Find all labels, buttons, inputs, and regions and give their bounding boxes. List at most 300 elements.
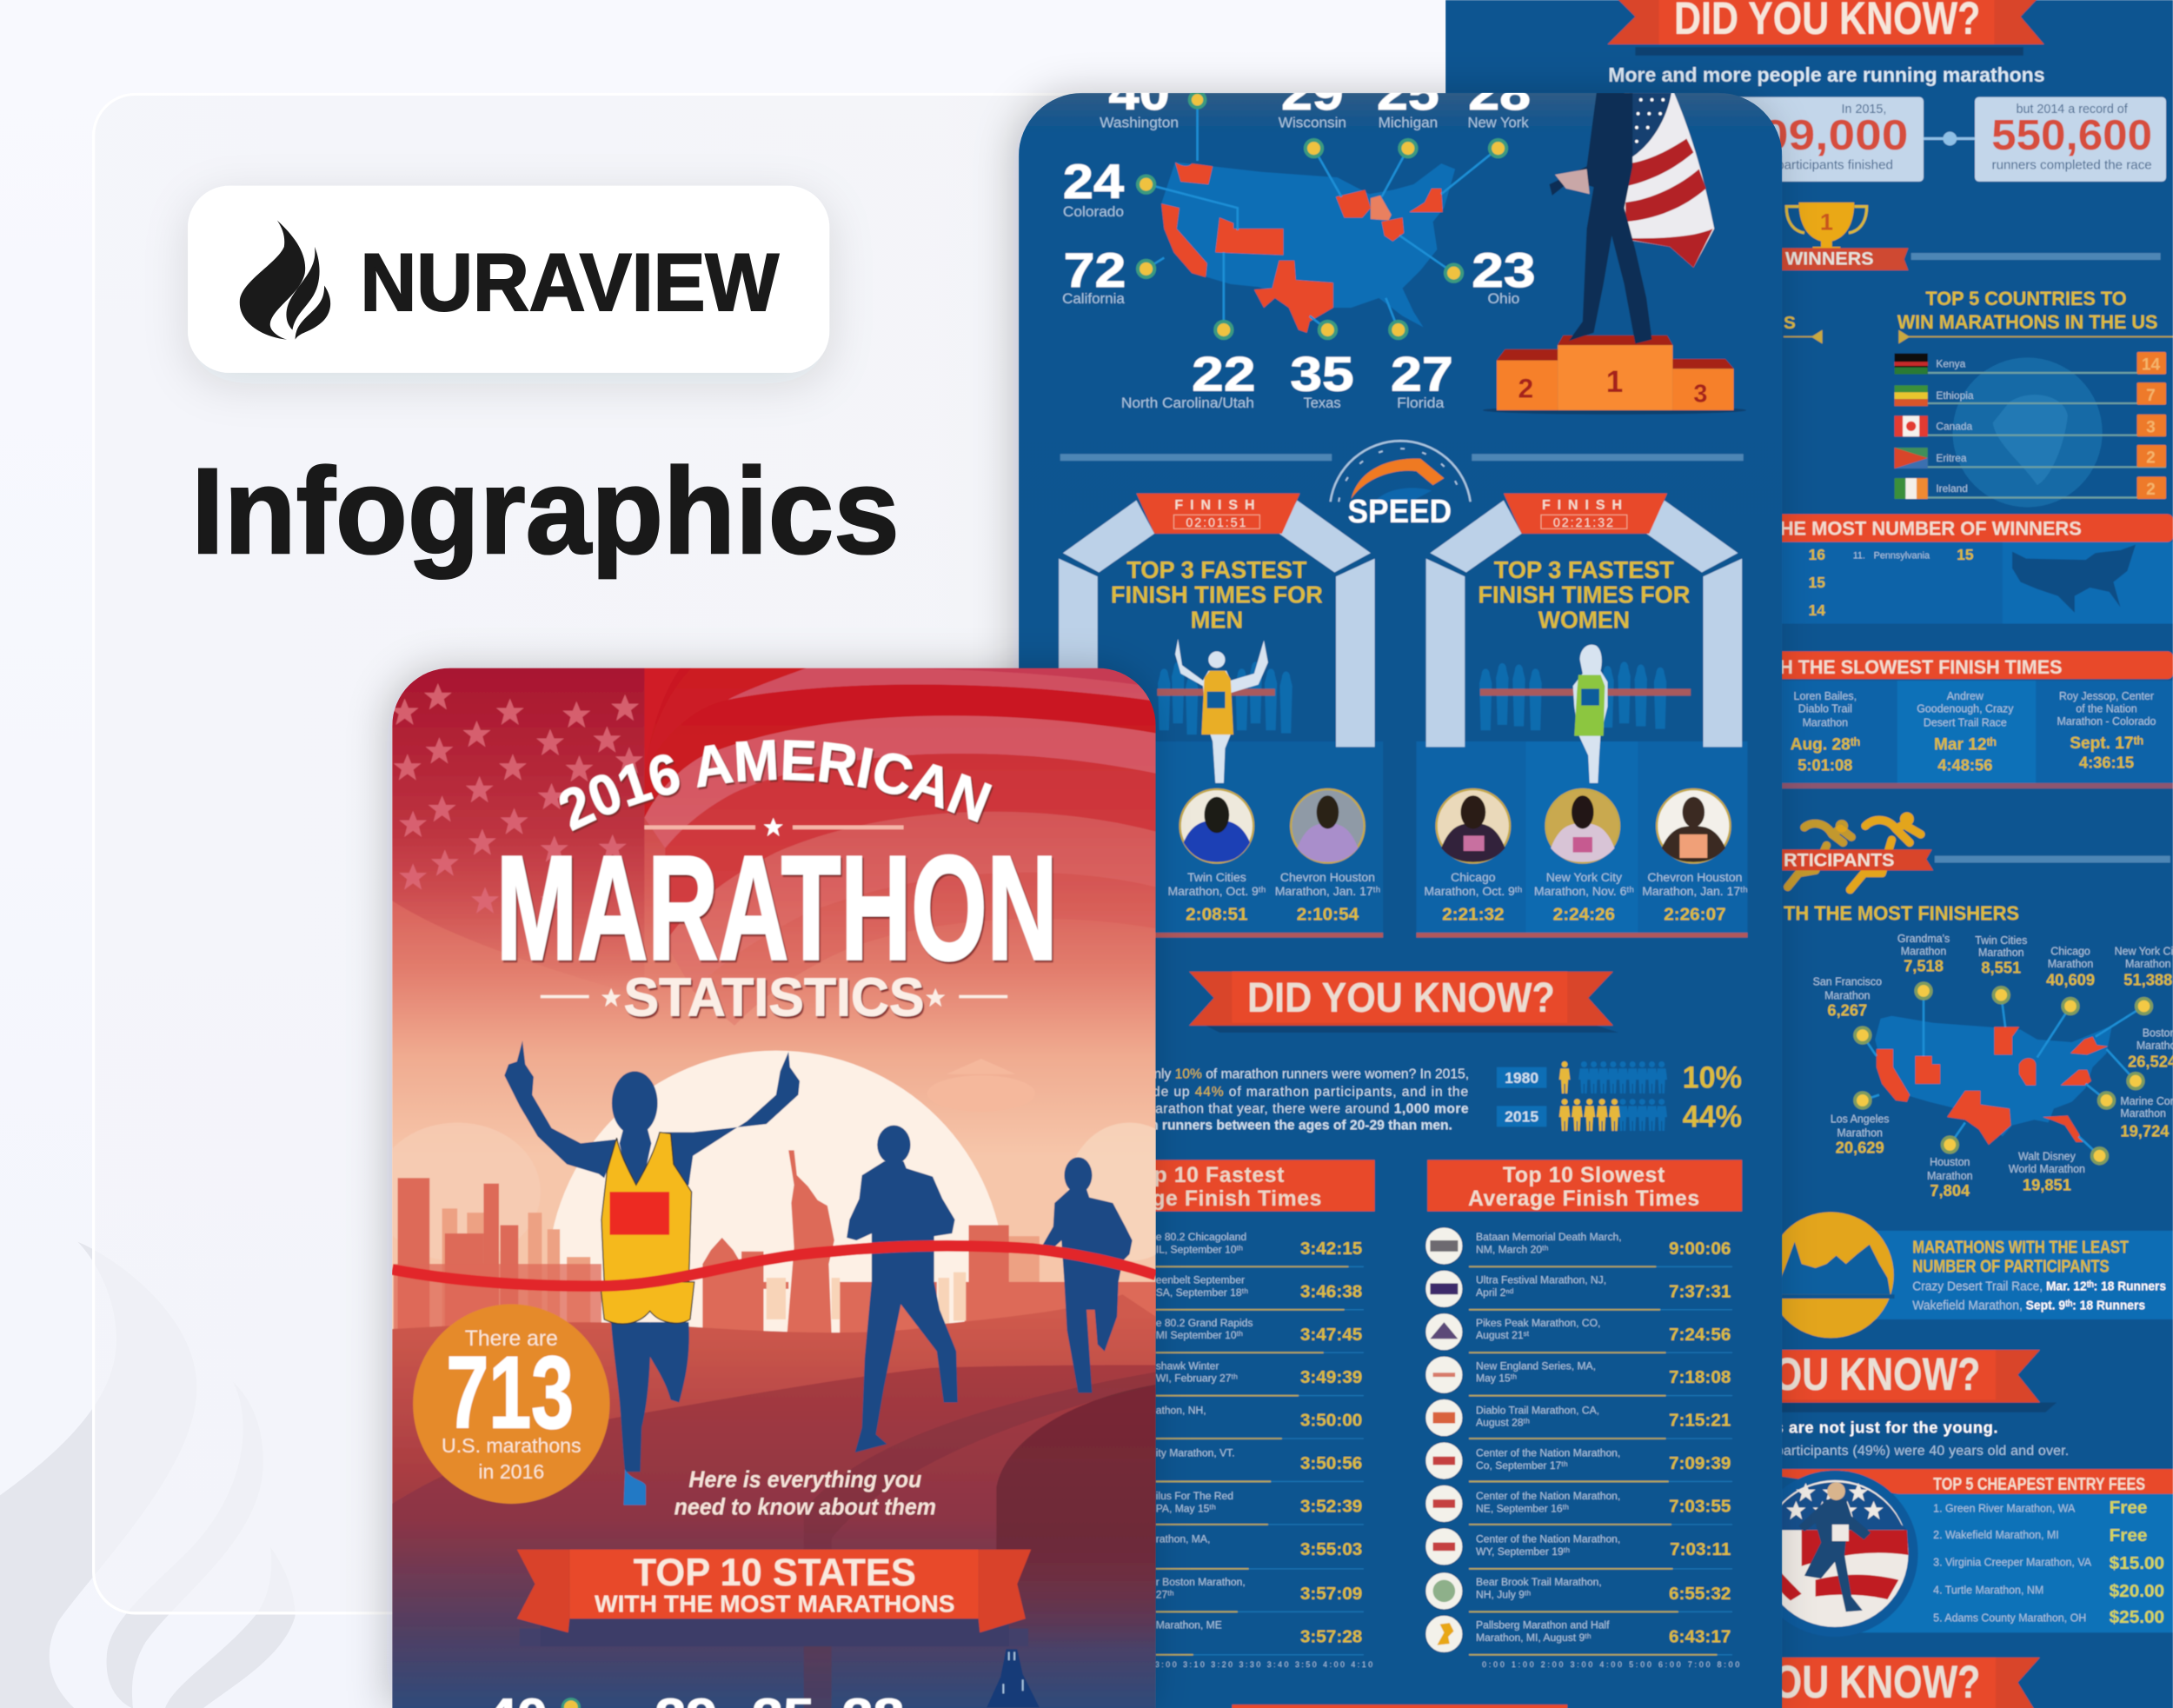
- finish time labels: New York City: [1546, 870, 1622, 884]
- icon: American flag runner badge: [1751, 1471, 1918, 1637]
- map labels: 8,551: [1981, 958, 2021, 976]
- text: top 5 countries: WIN MARATHONS IN THE US: [1897, 311, 2158, 333]
- icon: trophy: 1: [1820, 209, 1833, 236]
- paragraph: women runners: women made up 44% of marathon participants, and in the: [1080, 1085, 1469, 1100]
- map labels: Houston: [1930, 1156, 1970, 1168]
- banner: winners: WINNERS: [1785, 249, 1874, 269]
- panel: top 5 cheapest entry fees: 5. Adams County Marathon, OH: [1933, 1612, 2086, 1624]
- table: slowest finish times: Top 10 Slowest: [1503, 1164, 1665, 1187]
- panel: top 5 cheapest entry fees: 2. Wakefield Marathon, MI: [1933, 1529, 2059, 1541]
- table: fastest finish times: 3:49:39: [1300, 1367, 1362, 1387]
- section: slowest finish times: 4:48:56: [1937, 756, 1992, 774]
- finish time labels: 2:24:26: [1553, 905, 1615, 925]
- table: fastest finish times: 3:47:45: [1300, 1325, 1362, 1345]
- state numbers: [487, 1688, 904, 1708]
- row: Canada: 3: [2146, 418, 2156, 436]
- state numbers: 23: [1472, 243, 1536, 297]
- table: fastest finish times: 3:50:00: [1300, 1411, 1362, 1431]
- figure: lead runner: [504, 1040, 800, 1505]
- figure: athlete with flag: [1550, 93, 1714, 343]
- table: fastest finish times: r Boston Marathon,: [1156, 1576, 1246, 1588]
- state names: Ohio: [1488, 290, 1519, 307]
- section: most number of winners: 16: [1809, 546, 1825, 563]
- portraits: [1180, 789, 1731, 863]
- podium: [1483, 336, 1746, 415]
- banner: did you know top: [1607, 0, 2044, 56]
- finish time labels: [1167, 870, 1748, 925]
- stat box: 2014: runners completed the race: [1992, 158, 2152, 173]
- state numbers: 72: [1064, 243, 1126, 297]
- state numbers: 22: [1192, 347, 1256, 402]
- section: most number of winners: 14: [1809, 601, 1825, 619]
- table: fastest finish times: 3:50:56: [1300, 1453, 1362, 1473]
- flag stripes: [644, 668, 1156, 1026]
- state marker: [562, 1699, 579, 1708]
- state numbers: 24: [1063, 154, 1124, 209]
- arch: men: TOP 3 FASTEST: [1126, 556, 1307, 583]
- text: intro tagline: [674, 1465, 936, 1520]
- map labels: San Francisco: [1813, 976, 1882, 988]
- map labels: Marathon: [2120, 1107, 2166, 1120]
- gauge: speed: SPEED: [1348, 493, 1452, 530]
- title line: Statistics: STATISTICS: [623, 968, 924, 1028]
- table: slowest finish times: Co, September 17ᵗʰ: [1476, 1459, 1568, 1472]
- panel: top 5 cheapest entry fees: $25.00: [2110, 1607, 2164, 1627]
- star divider: [644, 818, 904, 836]
- paragraph: women runners: last marathon that year, there were around 1,000 more: [1117, 1101, 1469, 1116]
- banner: next section: [1232, 1705, 1567, 1708]
- text: not just for the young: Marathons are not just for the young.: [1699, 1419, 1998, 1437]
- table: fastest finish times: Top 10 Fastest: [1128, 1164, 1285, 1187]
- section: slowest finish times: Desert Trail Race: [1924, 716, 2007, 728]
- table: fastest finish times: Average Finish Times: [1090, 1187, 1322, 1211]
- banner: participants: RTICIPANTS: [1784, 850, 1895, 871]
- map labels: 19,851: [2023, 1176, 2071, 1194]
- callout: 713 marathons: U.S. marathons: [442, 1434, 581, 1457]
- panel: top 5 cheapest entry fees: [1732, 1469, 2173, 1632]
- finish time labels: 2:10:54: [1297, 905, 1359, 925]
- map labels: Los Angeles: [1831, 1113, 1890, 1125]
- row: Ethiopia: [1895, 382, 2166, 406]
- panel: least participants: MARATHONS WITH THE LEAST: [1912, 1238, 2129, 1257]
- section: slowest finish times: Marathon: [1803, 716, 1848, 728]
- row: Eritrea: [1895, 445, 2166, 469]
- text: top 5 countries: TOP 5 COUNTRIES TO: [1925, 288, 2127, 309]
- panel: top 5 cheapest entry fees: 3. Virginia Creeper Marathon, VA: [1933, 1557, 2092, 1569]
- stat box: 2014: [1975, 97, 2166, 182]
- finish time labels: 2:08:51: [1186, 905, 1248, 925]
- map labels: Grandma's: [1897, 933, 1950, 945]
- table: slowest finish times: NE, September 16ᵗʰ: [1476, 1503, 1569, 1515]
- podium: 1: [1606, 365, 1623, 399]
- section: slowest finish times: [1732, 651, 2173, 788]
- banner: did you know: DID YOU KNOW?: [1247, 975, 1555, 1021]
- state names: Florida: [1397, 395, 1445, 411]
- row: Eritrea: 2: [2146, 449, 2156, 468]
- map labels: Marathon: [1978, 947, 2024, 959]
- section: most number of winners: [1732, 515, 2173, 624]
- table: slowest finish times: Center of the Nation Marathon,: [1476, 1533, 1620, 1545]
- section: most number of winners: Pennsylvania: [1874, 551, 1930, 562]
- figure: background runner center: [847, 1126, 958, 1452]
- banner: did you know middle: [1607, 1349, 2057, 1412]
- banner: winners: [1732, 248, 2161, 270]
- pictogram: 1980 vs 2015: 1980: [1505, 1069, 1538, 1087]
- table: slowest finish times: Diablo Trail Marathon, CA,: [1476, 1404, 1599, 1416]
- banner: participants: [1732, 849, 2170, 871]
- section: slowest finish times: of the Nation: [2076, 703, 2137, 715]
- table: slowest finish times: Center of the Nation Marathon,: [1476, 1447, 1620, 1459]
- map labels: Twin Cities: [1975, 934, 2027, 947]
- portrait: New York City winner: [1546, 789, 1619, 863]
- finish time labels: Chevron Houston: [1647, 870, 1742, 884]
- stat box: 2014: 550,600: [1991, 111, 2152, 159]
- arch: women: FINISH TIMES FOR: [1478, 582, 1690, 608]
- wordmark: NURAVIEW: [361, 236, 779, 328]
- map labels: Walt Disney: [2018, 1151, 2077, 1163]
- pictogram: 1980 vs 2015: 2015: [1505, 1108, 1538, 1126]
- paragraph: women runners: women runners between the ages of 20-29 than men.: [1111, 1118, 1452, 1133]
- text: top 5 countries: S: [1784, 313, 1796, 333]
- table: slowest finish times: Pikes Peak Marathon, CO,: [1476, 1317, 1600, 1329]
- table: fastest finish times: e 80.2 Grand Rapids: [1156, 1317, 1253, 1329]
- finish time labels: 2:26:07: [1664, 905, 1726, 925]
- pictogram: 1980 vs 2015: 44%: [1683, 1100, 1742, 1133]
- table: slowest finish times: NH, July 9ᵗʰ: [1476, 1588, 1532, 1600]
- stat box: 2015: participants finished: [1777, 158, 1893, 173]
- row: Canada: [1895, 415, 2166, 436]
- panel: top 5 cheapest entry fees: 4. Turtle Marathon, NM: [1933, 1585, 2043, 1597]
- section: slowest finish times: Sept. 17ᵗʰ: [2070, 734, 2143, 753]
- table: fastest finish times: 3:00 3:10 3:20 3:30 3:40 3:50 4:00 4:10: [1155, 1660, 1375, 1669]
- section: most number of winners: 11.: [1853, 551, 1865, 562]
- finish time labels: Marathon, Jan. 17ᵗʰ: [1642, 884, 1748, 898]
- table: fastest finish times: IL, September 10ᵗʰ: [1156, 1243, 1243, 1255]
- portrait: Chicago winner: [1437, 789, 1510, 863]
- callout: 713 marathons: There are: [465, 1327, 558, 1351]
- table: slowest finish times: 6:43:17: [1669, 1626, 1731, 1646]
- heading: most finishers: TH THE MOST FINISHERS: [1784, 902, 2019, 925]
- finish ribbon: [392, 1246, 1156, 1286]
- panel: front infographic: [367, 648, 1168, 1708]
- map labels: World Marathon: [2009, 1163, 2085, 1175]
- table: slowest finish times: 7:15:21: [1669, 1411, 1731, 1431]
- row: Canada: Canada: [1936, 420, 1973, 432]
- icon: flame logo: [240, 221, 330, 340]
- map labels: Marathon: [1901, 946, 1946, 958]
- row: Eritrea: Eritrea: [1936, 452, 1967, 464]
- section: most number of winners: THE MOST NUMBER OF WINNERS: [1768, 517, 2082, 539]
- table: slowest finish times: Bataan Memorial Death March,: [1476, 1231, 1622, 1243]
- section: slowest finish times: Aug. 28ᵗʰ: [1791, 736, 1860, 754]
- section: slowest finish times: Mar 12ᵗʰ: [1934, 736, 1997, 754]
- map labels: Marathon: [2048, 958, 2093, 970]
- banner: did you know: [1189, 972, 1618, 1033]
- map labels: 20,629: [1836, 1139, 1884, 1157]
- finish time labels: Marathon, Nov. 6ᵗʰ: [1534, 884, 1634, 898]
- panel: top 5 cheapest entry fees: Free: [2110, 1498, 2147, 1518]
- table: fastest finish times: ilus For The Red: [1156, 1490, 1233, 1502]
- map labels: Chicago: [2050, 946, 2090, 958]
- finish time labels: 2:21:32: [1442, 905, 1505, 925]
- table: slowest finish times: 7:37:31: [1669, 1281, 1731, 1301]
- panel: finish cards: [1109, 741, 1748, 938]
- section: slowest finish times: Loren Bailes,: [1794, 690, 1857, 702]
- table: slowest finish times: 6:55:32: [1669, 1584, 1731, 1604]
- row: Kenya: 14: [2142, 356, 2160, 375]
- title: [501, 739, 1053, 1020]
- logo badge: [188, 186, 829, 373]
- table: slowest finish times: New England Series, MA,: [1476, 1359, 1596, 1372]
- arch: men: MEN: [1191, 606, 1243, 633]
- section: most number of winners: 15: [1957, 546, 1974, 563]
- banner: did you know middle: DID YOU KNOW?: [1674, 1349, 1980, 1400]
- banner: top 10 states: [517, 1550, 1031, 1646]
- panel: least participants: [1767, 1212, 2173, 1338]
- table: fastest finish times: 27ᵗʰ: [1156, 1588, 1174, 1600]
- map labels: 40,609: [2046, 971, 2095, 989]
- finish time labels: Chicago: [1451, 870, 1496, 884]
- section: slowest finish times: 4:36:15: [2079, 753, 2134, 771]
- state numbers: 35: [1290, 347, 1354, 402]
- icon: gold runners: [1788, 816, 1921, 890]
- table: fastest finish times: 3:46:38: [1300, 1281, 1362, 1301]
- figure: male finisher: [1157, 639, 1275, 783]
- watermark flame: [0, 1242, 296, 1708]
- panel: rear infographic: [1445, 0, 2173, 1708]
- row: Kenya: [1895, 352, 2166, 375]
- portrait: Twin Cities winner: [1180, 789, 1253, 863]
- table: slowest finish times: 9:00:06: [1669, 1239, 1731, 1259]
- icon: trophy: [1786, 203, 1867, 252]
- state names: Michigan: [1379, 115, 1438, 131]
- map labels: 51,388: [2123, 971, 2172, 989]
- table: slowest finish times: Marathon, MI, August 9ᵗʰ: [1476, 1632, 1592, 1644]
- text: not just for the young: [1688, 1419, 2069, 1459]
- table: slowest finish times: Ultra Festival Marathon, NJ,: [1476, 1273, 1606, 1286]
- figure: background runner right: [1042, 1157, 1133, 1392]
- map: winners: [2012, 545, 2136, 613]
- section: slowest finish times: Marathon - Colorado: [2057, 715, 2156, 728]
- arch: men: [1059, 494, 1375, 747]
- section: slowest finish times: Roy Jessop, Center: [2059, 690, 2154, 702]
- state numbers: 29: [1281, 65, 1344, 120]
- map: finishers: [1875, 1016, 2112, 1145]
- state numbers: [1063, 65, 1536, 402]
- arch: men: 02:01:51: [1186, 516, 1247, 530]
- table: slowest finish times: Bear Brook Trail Marathon,: [1476, 1576, 1602, 1588]
- section: most number of winners: 15: [1809, 574, 1825, 591]
- callout: 713 marathons: [413, 1304, 610, 1504]
- map connectors and markers: [1855, 983, 2151, 1164]
- table: slowest finish times: 7:03:11: [1670, 1539, 1731, 1559]
- pictogram: 1980 vs 2015: 10%: [1683, 1061, 1742, 1095]
- table: fastest finish times: Marathon, ME: [1156, 1618, 1222, 1631]
- section: slowest finish times: 5:01:08: [1798, 756, 1852, 774]
- state numbers: 25: [1377, 65, 1439, 120]
- callout: 713 marathons: 713: [446, 1335, 574, 1450]
- table: slowest finish times: April 2ⁿᵈ: [1476, 1286, 1514, 1299]
- podium: 2: [1518, 373, 1533, 404]
- state numbers: 27: [1391, 347, 1453, 402]
- state numbers: 28: [1468, 65, 1531, 120]
- state names: Washington: [1100, 115, 1179, 131]
- row: Ireland: 2: [2146, 481, 2156, 499]
- state names: Wisconsin: [1279, 115, 1346, 131]
- table: slowest finish times: August 21ˢᵗ: [1476, 1329, 1530, 1341]
- table: fastest finish times: rathon, MA,: [1156, 1533, 1210, 1545]
- table: slowest finish times: NM, March 20ᵗʰ: [1476, 1243, 1549, 1255]
- map: top 10 states: [1161, 163, 1455, 333]
- ground hills: [392, 1294, 1156, 1708]
- table: slowest finish times: 0:00 1:00 2:00 3:00 4:00 5:00 6:00 7:00 8:00: [1482, 1660, 1742, 1669]
- section: slowest finish times: H THE SLOWEST FINISH TIMES: [1779, 656, 2063, 678]
- section: slowest finish times: Goodenough, Crazy: [1917, 703, 2014, 715]
- subheading: More and more people are running marathons: [1608, 63, 2045, 86]
- row: Ethiopia: Ethiopia: [1936, 389, 1974, 402]
- section: slowest finish times: Andrew: [1947, 690, 1984, 702]
- map labels: 7,804: [1930, 1181, 1970, 1200]
- row: Ireland: [1895, 477, 2166, 499]
- heading: Infographics: Infographics: [191, 442, 900, 579]
- table: slowest finish times: [1425, 1160, 1742, 1669]
- map labels: 19,724: [2120, 1121, 2170, 1140]
- portrait: Chevron Houston winner: [1291, 789, 1365, 863]
- panel: top 5 cheapest entry fees: $20.00: [2110, 1581, 2164, 1601]
- table: fastest finish times: eenbelt September: [1156, 1273, 1245, 1286]
- icon: gold skyline circle: [1767, 1212, 1895, 1338]
- figure: athlete spire: [987, 1649, 1040, 1707]
- state names: California: [1062, 290, 1126, 307]
- table: fastest finish times: 3:42:15: [1300, 1239, 1362, 1259]
- banner: top 10 states: TOP 10 STATES: [634, 1552, 916, 1594]
- panel: least participants: NUMBER OF PARTICIPANTS: [1912, 1258, 2110, 1277]
- row: Kenya: Kenya: [1936, 358, 1966, 370]
- sun and clouds: [374, 1051, 1192, 1508]
- section: slowest finish times: Diablo Trail: [1798, 703, 1852, 715]
- finish time labels: Marathon, Oct. 9ᵗʰ: [1424, 884, 1522, 898]
- skyline: [394, 1150, 1159, 1340]
- arch: women: FINISH: [1542, 498, 1629, 513]
- figure: female finisher: [1480, 645, 1691, 783]
- pictogram: 1980 vs 2015: [1497, 1061, 1742, 1133]
- table: fastest finish times: 3:52:39: [1300, 1497, 1362, 1517]
- table: fastest finish times: 3:57:28: [1300, 1626, 1362, 1646]
- arch: women: 02:21:32: [1553, 516, 1615, 530]
- map labels: 6,267: [1827, 1001, 1867, 1020]
- dividers: [1060, 454, 1744, 461]
- text: top 5 countries: [1784, 288, 2173, 343]
- table: fastest finish times: PA, May 15ᵗʰ: [1156, 1503, 1216, 1515]
- table: fastest finish times: shawk Winter: [1156, 1359, 1219, 1372]
- text: intro tagline: Here is everything you: [688, 1465, 922, 1492]
- panel: top 5 cheapest entry fees: Free: [2110, 1525, 2147, 1545]
- finish time labels: Marathon, Oct. 9ᵗʰ: [1167, 884, 1266, 898]
- map labels: Marathon: [1824, 990, 1871, 1002]
- row: Ireland: Ireland: [1936, 482, 1968, 495]
- map labels: Marathon: [1927, 1170, 1973, 1182]
- finish time labels: Marathon, Jan. 17ᵗʰ: [1275, 884, 1380, 898]
- table: slowest finish times: 7:03:55: [1669, 1497, 1731, 1517]
- table: fastest finish times: 3:55:03: [1300, 1539, 1362, 1559]
- table: fastest finish times: ity Marathon, VT.: [1156, 1447, 1235, 1459]
- panel: top 5 cheapest entry fees: 1. Green River Marathon, WA: [1933, 1503, 2076, 1515]
- table: fastest finish times: MI September 10ᵗʰ: [1156, 1329, 1243, 1341]
- table: slowest finish times: 7:18:08: [1669, 1367, 1731, 1387]
- title: 2016 AMERICAN: [558, 739, 994, 834]
- panel: top 5 cheapest entry fees: $15.00: [2110, 1553, 2164, 1573]
- flag canton with stars: [391, 668, 644, 998]
- crowd: [1158, 661, 1666, 734]
- panel: middle infographic: [987, 65, 1782, 1708]
- table: fastest finish times: athon, NH,: [1156, 1404, 1206, 1416]
- map labels: Marathon: [1837, 1126, 1883, 1139]
- table: fastest finish times: [1090, 1160, 1375, 1669]
- table: fastest finish times: WI, February 27ᵗʰ: [1156, 1372, 1238, 1385]
- arch: men: FINISH: [1174, 498, 1262, 513]
- table: slowest finish times: May 15ᵗʰ: [1476, 1372, 1517, 1385]
- table: slowest finish times: Pallsberg Marathon and Half: [1476, 1618, 1610, 1631]
- text: not just for the young: Nearly half of participants (49%) were 40 years old and over.: [1688, 1444, 2069, 1459]
- arch: women: [1426, 494, 1742, 747]
- table: slowest finish times: WY, September 19ᵗʰ: [1476, 1545, 1570, 1558]
- finish time labels: Chevron Houston: [1280, 870, 1375, 884]
- table: slowest finish times: Average Finish Times: [1468, 1187, 1700, 1211]
- title line: 2016 American: [571, 780, 993, 832]
- map labels: 7,518: [1904, 957, 1944, 975]
- arch: men: FINISH TIMES FOR: [1111, 582, 1323, 608]
- paragraph: women runners: [987, 1067, 1469, 1133]
- callout: 713 marathons: in 2016: [478, 1460, 544, 1483]
- finish time labels: Twin Cities: [1187, 870, 1246, 884]
- panel: least participants: Crazy Desert Trail Race, Mar. 12ᵗʰ: 18 Runners: [1912, 1279, 2166, 1293]
- title line: Marathon: MARATHON: [496, 826, 1058, 991]
- paragraph: women runners: Did you know that in 1980 only 10% of marathon runners were women? In 2015,: [987, 1067, 1469, 1081]
- connector dot: [1924, 132, 1975, 145]
- state names: Texas: [1304, 395, 1341, 411]
- state names: North Carolina/Utah: [1121, 395, 1254, 411]
- connectors: [1146, 100, 1499, 330]
- row: Ethiopia: 7: [2146, 387, 2156, 405]
- stat box: 2015: [1732, 97, 1924, 182]
- state names: [1062, 115, 1529, 411]
- panel: least participants: Wakefield Marathon, Sept. 9ᵗʰ: 18 Runners: [1912, 1299, 2145, 1313]
- arch: women: TOP 3 FASTEST: [1494, 556, 1674, 583]
- table: fastest finish times: SA, September 18ᵗʰ: [1156, 1286, 1248, 1299]
- banner: did you know bottom: DID YOU KNOW?: [1674, 1657, 1980, 1708]
- country list: [1895, 352, 2166, 499]
- state names: Colorado: [1063, 203, 1124, 220]
- table: slowest finish times: 7:09:39: [1669, 1453, 1731, 1473]
- map labels: Marathon: [2125, 958, 2171, 970]
- map labels: [1813, 933, 2173, 1200]
- background card: [94, 94, 1618, 1613]
- table: slowest finish times: 7:24:56: [1669, 1325, 1731, 1345]
- table: slowest finish times: Center of the Nation Marathon,: [1476, 1490, 1620, 1502]
- state numbers: 40: [1109, 65, 1170, 120]
- table: slowest finish times: August 28ᵗʰ: [1476, 1417, 1530, 1429]
- stat box: 2014: but 2014 a record of: [2016, 103, 2128, 116]
- table: fastest finish times: 3:57:09: [1300, 1584, 1362, 1604]
- banner: top 10 states: WITH THE MOST MARATHONS: [595, 1590, 955, 1617]
- title line: Statistics: [541, 968, 1007, 1028]
- gauge: speed: [1331, 441, 1471, 530]
- podium: 3: [1693, 380, 1707, 408]
- text: intro tagline: need to know about them: [674, 1493, 936, 1520]
- state names: New York: [1467, 115, 1529, 131]
- globe: [1952, 357, 2103, 508]
- state markers: [1138, 92, 1506, 338]
